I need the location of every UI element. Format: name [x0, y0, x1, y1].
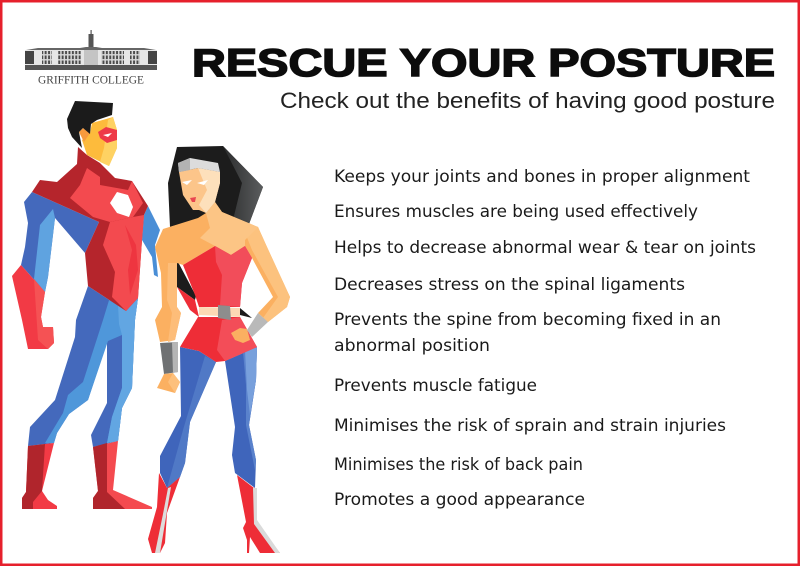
benefit 9: Promotes a good appearance	[334, 490, 585, 510]
benefit 2: Ensures muscles are being used effectively	[334, 202, 698, 222]
man: head	[67, 101, 117, 166]
woman: skin	[155, 202, 290, 342]
man: torso	[32, 147, 148, 311]
benefits list	[334, 167, 756, 510]
woman: legs	[160, 347, 257, 488]
title: RESCUE YOUR POSTURE	[192, 42, 775, 85]
illustration: male superhero	[12, 101, 160, 509]
man: boots	[22, 441, 152, 509]
benefit 5: abnormal position	[334, 336, 490, 356]
woman: cape detail	[177, 287, 252, 318]
benefit 8: Minimises the risk of back pain	[334, 455, 583, 475]
benefit 6: Prevents muscle fatigue	[334, 376, 537, 396]
woman: boots	[148, 473, 280, 553]
subtitle: Check out the benefits of having good posture	[280, 88, 775, 113]
man: chest emblem	[110, 192, 133, 217]
woman: dress	[180, 246, 257, 362]
woman: belt	[199, 305, 240, 320]
woman: headband	[178, 158, 220, 172]
benefit 5	[334, 310, 721, 356]
benefit 3: Helps to decrease abnormal wear & tear on joints	[334, 238, 756, 258]
logo wordmark: GRIFFITH COLLEGE	[38, 72, 144, 86]
logo: Griffith College	[25, 30, 157, 86]
benefit 4: Decreases stress on the spinal ligaments	[334, 275, 685, 295]
benefit 1: Keeps your joints and bones in proper alignment	[334, 167, 750, 187]
illustration: female superhero	[148, 146, 290, 553]
benefit 7: Minimises the risk of sprain and strain injuries	[334, 416, 726, 436]
man: left arm	[12, 192, 99, 349]
woman: face	[179, 168, 220, 213]
icon: college building	[25, 30, 157, 70]
man: legs	[28, 286, 138, 447]
benefit 5: Prevents the spine from becoming fixed in an	[334, 310, 721, 330]
man: right arm	[142, 206, 160, 277]
woman: hands and wrist bands	[157, 313, 268, 393]
woman: hair	[168, 146, 263, 300]
